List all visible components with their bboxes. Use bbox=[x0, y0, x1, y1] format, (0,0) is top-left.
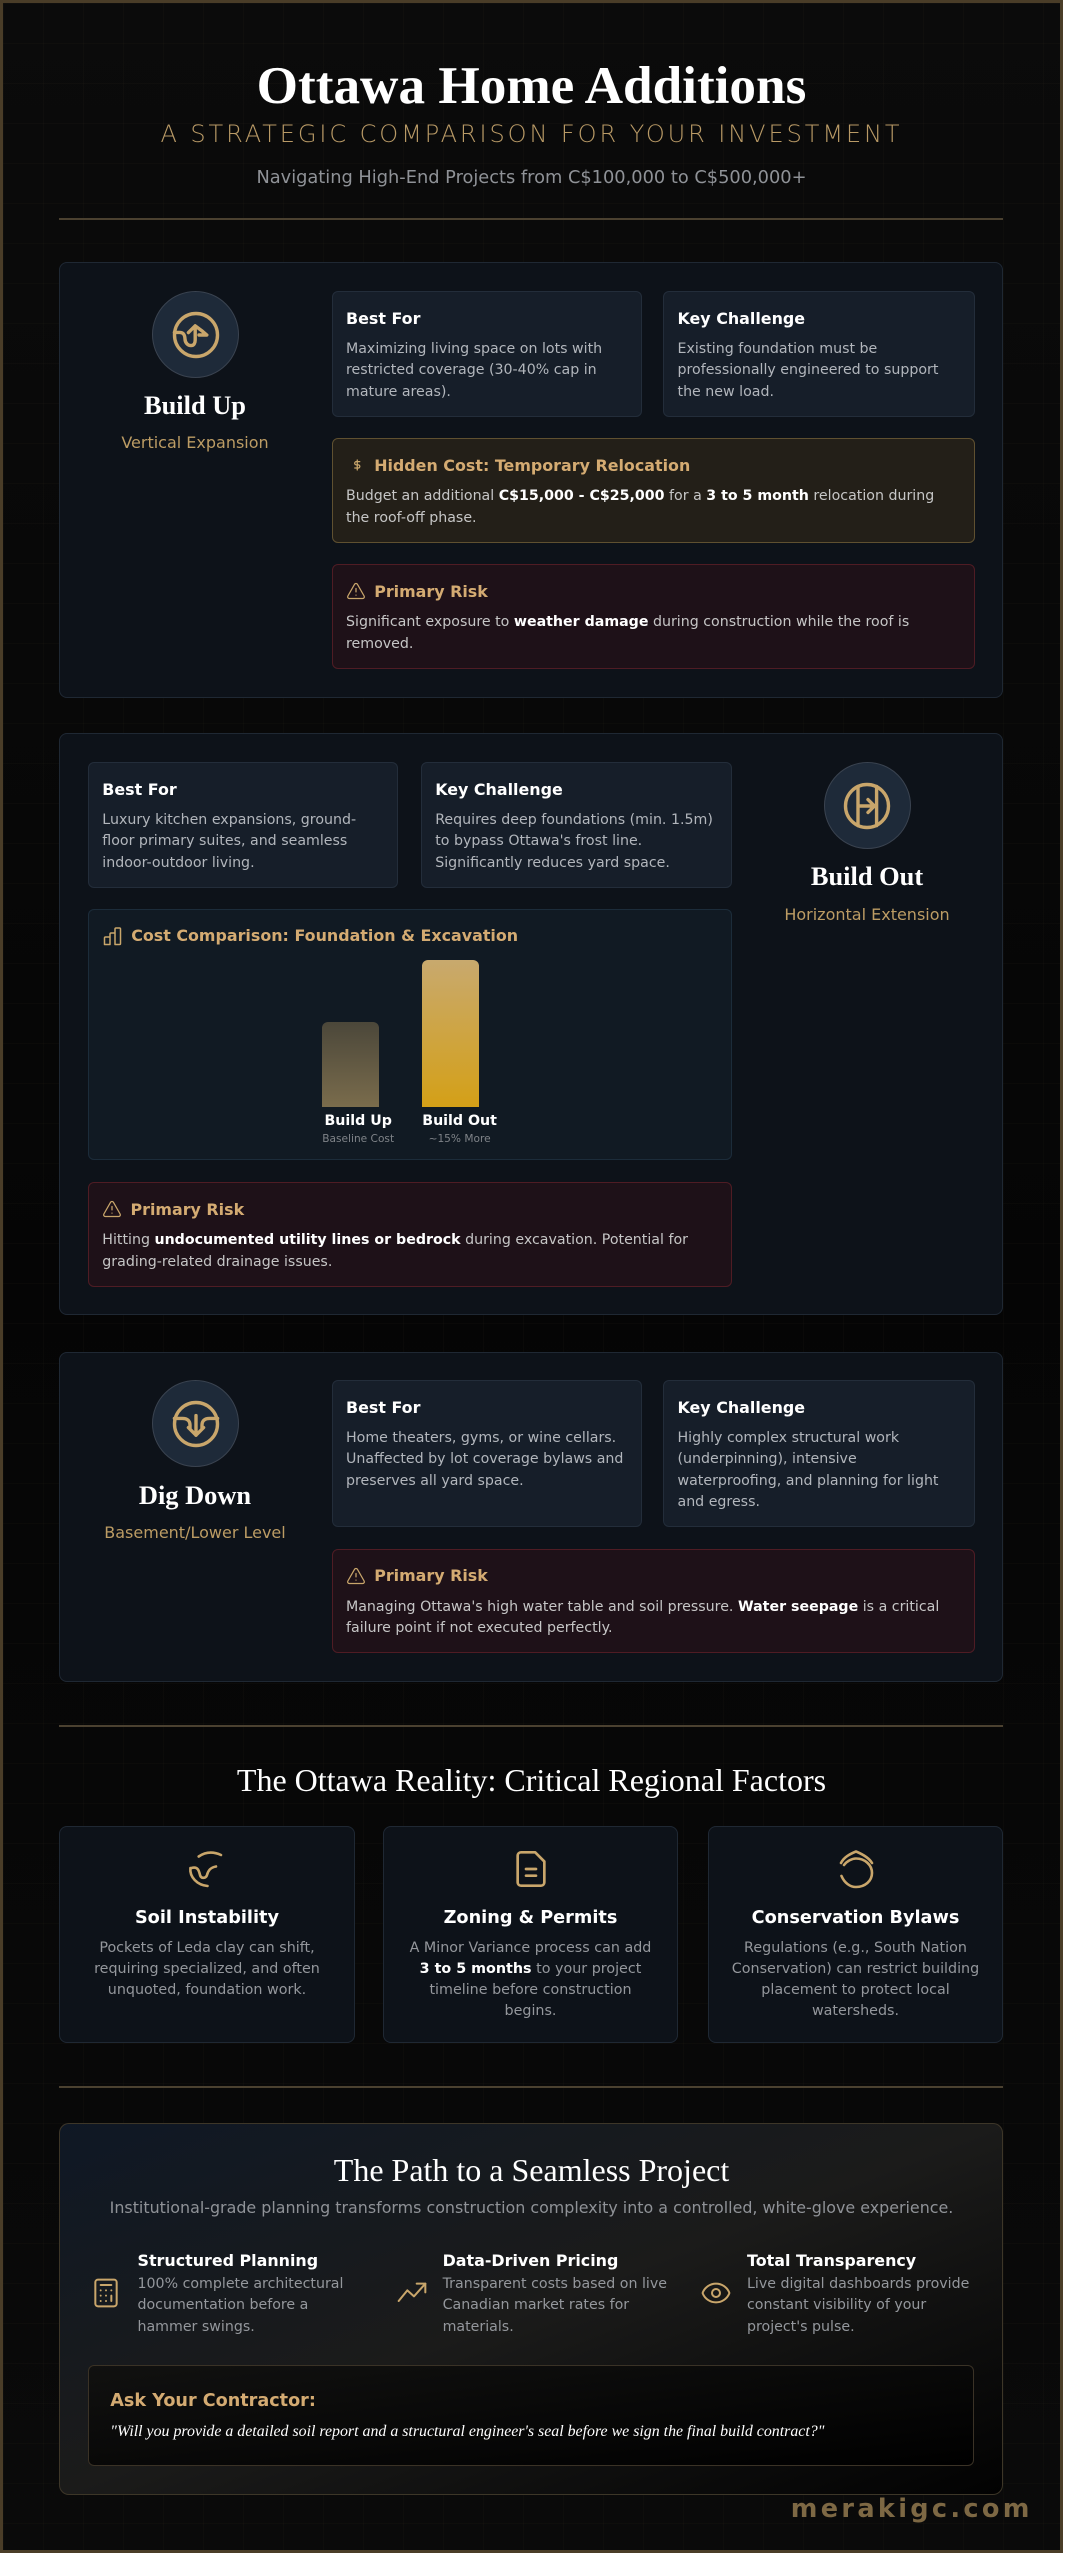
callout: primary risk bbox=[332, 1549, 974, 1653]
bar: build up bbox=[322, 1022, 379, 1107]
subheading: horizontal extension: Horizontal Extension bbox=[784, 905, 950, 924]
icon: build out bbox=[824, 762, 910, 849]
card: key challenge: Existing foundation must be bbox=[678, 341, 877, 357]
callout: primary risk: Primary Risk bbox=[374, 1566, 488, 1585]
subtitle: A STRATEGIC COMPARISON FOR YOUR INVESTMENT bbox=[160, 120, 902, 148]
callout: hidden cost bbox=[332, 438, 974, 543]
feature heading: Data-Driven Pricing bbox=[443, 2251, 618, 2270]
tagline: Navigating High-End Projects from C$100,000 to C$500,000+ bbox=[256, 167, 807, 188]
icon: dig down bbox=[152, 1380, 239, 1467]
card: key challenge: Key Challenge bbox=[435, 780, 563, 798]
card: best for bbox=[332, 1380, 642, 1527]
factor text bbox=[732, 1940, 979, 2019]
subheading: vertical expansion: Vertical Expansion bbox=[121, 433, 269, 452]
feature text: Live digital dashboards provide bbox=[747, 2276, 969, 2292]
section heading: regional factors: The Ottawa Reality: Critical Regional Factors bbox=[237, 1762, 826, 1798]
card: key challenge: Significantly reduces yard space. bbox=[435, 855, 670, 871]
card: key challenge: to bypass Ottawa's frost line. bbox=[435, 833, 642, 849]
card: best for: Best For bbox=[102, 780, 177, 798]
heading: build up: Build Up bbox=[144, 390, 246, 420]
heading: build out: Build Out bbox=[811, 861, 923, 891]
factor text: timeline before construction bbox=[429, 1982, 632, 1998]
feature text: project's pulse. bbox=[747, 2319, 855, 2335]
callout: primary risk: Significant exposure to weather damage during construction while the roof is bbox=[346, 614, 909, 630]
callout: primary risk: Primary Risk bbox=[374, 582, 488, 600]
card: best for: floor primary suites, and seamless bbox=[102, 833, 347, 849]
intro text: Institutional-grade planning transforms construction complexity into a controlled, white-glove experience. bbox=[110, 2198, 953, 2217]
icon: calculator bbox=[94, 2278, 118, 2308]
icon: eye bbox=[702, 2282, 730, 2304]
feature text: hammer swings. bbox=[138, 2319, 255, 2335]
panel: soil instability bbox=[59, 1826, 355, 2043]
quote: "Will you provide a detailed soil report and a structural engineer's seal before we sign the final build contract?" bbox=[110, 2423, 824, 2440]
watermark: merakigc.com bbox=[791, 2494, 1033, 2524]
card: best for: preserves all yard space. bbox=[346, 1473, 524, 1489]
card: best for: Best For bbox=[346, 1398, 420, 1416]
card: best for: restricted coverage (30-40% cap in bbox=[346, 362, 597, 378]
feature heading: Structured Planning bbox=[138, 2251, 318, 2270]
factor text: Conservation) can restrict building bbox=[732, 1961, 979, 1977]
heading: dig down: Dig Down bbox=[139, 1480, 251, 1510]
icon: soil bbox=[189, 1851, 222, 1888]
heading: The Path to a Seamless Project bbox=[334, 2152, 729, 2188]
card: key challenge: Requires deep foundations (min. 1.5m) bbox=[435, 812, 713, 828]
factor text bbox=[410, 1940, 651, 2019]
panel: build out bbox=[60, 734, 1003, 1315]
title: Ottawa Home Additions bbox=[257, 56, 806, 114]
callout: hidden cost: the roof-off phase. bbox=[346, 510, 477, 526]
callout: ask your contractor bbox=[88, 2365, 974, 2466]
card: key challenge: waterproofing, and planning for light bbox=[678, 1473, 938, 1489]
feature text: documentation before a bbox=[138, 2297, 308, 2313]
icon: document bbox=[516, 1851, 546, 1887]
callout: primary risk bbox=[88, 1182, 732, 1287]
factor heading: Conservation Bylaws bbox=[752, 1908, 959, 1928]
card: key challenge: the new load. bbox=[678, 384, 774, 400]
card: key challenge: (underpinning), intensive bbox=[678, 1451, 857, 1467]
factor text: Pockets of Leda clay can shift, bbox=[99, 1940, 315, 1956]
feature text bbox=[442, 2276, 667, 2335]
feature: total transparency bbox=[702, 2251, 969, 2335]
chart heading: Cost Comparison: Foundation & Excavation bbox=[131, 926, 518, 945]
card: key challenge bbox=[663, 1380, 974, 1527]
card: best for: mature areas). bbox=[346, 384, 451, 400]
factor text: placement to protect local bbox=[761, 1982, 950, 1998]
callout: primary risk: Primary Risk bbox=[130, 1200, 244, 1218]
feature text: Transparent costs based on live bbox=[443, 2276, 667, 2292]
subheading: basement: Basement/Lower Level bbox=[104, 1523, 286, 1542]
factor heading: Soil Instability bbox=[135, 1908, 279, 1928]
feature: data-driven pricing bbox=[398, 2251, 667, 2335]
card: best for: Maximizing living space on lots with bbox=[346, 341, 602, 357]
card: best for: Best For bbox=[346, 308, 420, 328]
feature text: 100% complete architectural bbox=[138, 2276, 343, 2292]
callout: hidden cost: Hidden Cost: Temporary Relocation bbox=[374, 456, 690, 474]
card: key challenge: Highly complex structural work bbox=[678, 1430, 899, 1446]
factor text: watersheds. bbox=[812, 2003, 899, 2019]
panel: conservation bylaws bbox=[708, 1826, 1003, 2043]
bar label: build up: Build Up bbox=[324, 1113, 392, 1129]
callout heading: Ask Your Contractor: bbox=[110, 2391, 316, 2411]
factor text: unquoted, foundation work. bbox=[108, 1982, 306, 1998]
card: best for: indoor-outdoor living. bbox=[102, 855, 255, 871]
card: key challenge bbox=[421, 762, 732, 888]
callout: primary risk: Managing Ottawa's high water table and soil pressure. Water seepage is a critical bbox=[346, 1599, 939, 1615]
factor heading: Zoning & Permits bbox=[444, 1908, 617, 1928]
factor text bbox=[94, 1940, 320, 1998]
feature text: Canadian market rates for bbox=[443, 2297, 629, 2313]
factor text: begins. bbox=[504, 2003, 556, 2019]
card: best for: Luxury kitchen expansions, ground- bbox=[102, 812, 356, 828]
icon: bar chart bbox=[104, 927, 122, 946]
factor text: requiring specialized, and often bbox=[94, 1961, 320, 1977]
bar: build out bbox=[422, 960, 479, 1107]
factor text: A Minor Variance process can add bbox=[410, 1940, 651, 1956]
feature heading: Total Transparency bbox=[747, 2251, 916, 2270]
callout: primary risk: failure point if not executed perfectly. bbox=[346, 1620, 612, 1636]
feature: structured planning bbox=[94, 2251, 343, 2335]
panel: build up bbox=[60, 262, 1003, 698]
callout: primary risk: grading-related drainage issues. bbox=[102, 1254, 332, 1270]
panel: seamless project bbox=[60, 2123, 1003, 2495]
factor text: 3 to 5 months to your project bbox=[420, 1961, 641, 1977]
card: key challenge: professionally engineered to support bbox=[678, 362, 938, 378]
factor text: Regulations (e.g., South Nation bbox=[744, 1940, 967, 1956]
bar note: 15 percent more: ~15% More bbox=[429, 1133, 491, 1145]
icon: build up bbox=[152, 291, 239, 378]
card: best for: Unaffected by lot coverage bylaws and bbox=[346, 1451, 623, 1467]
card: key challenge bbox=[663, 291, 974, 417]
feature text bbox=[747, 2276, 969, 2335]
feature text: materials. bbox=[443, 2319, 514, 2335]
card: key challenge: Key Challenge bbox=[678, 308, 805, 328]
panel: dig down bbox=[60, 1352, 1003, 1682]
callout: primary risk bbox=[332, 564, 974, 669]
card: best for bbox=[332, 291, 642, 417]
callout: primary risk: removed. bbox=[346, 636, 413, 652]
icon: conservation bbox=[840, 1850, 874, 1888]
callout: primary risk: Hitting undocumented utility lines or bedrock during excavation. Potential for bbox=[102, 1232, 688, 1248]
bar chart: cost comparison bbox=[88, 909, 732, 1160]
header bbox=[160, 56, 902, 188]
card: best for: Home theaters, gyms, or wine cellars. bbox=[346, 1430, 616, 1446]
callout: hidden cost: Budget an additional C$15,000 - C$25,000 for a 3 to 5 month relocation during bbox=[346, 488, 934, 504]
panel: zoning and permits bbox=[383, 1826, 678, 2043]
card: key challenge: and egress. bbox=[678, 1494, 760, 1510]
card: key challenge: Key Challenge bbox=[678, 1398, 805, 1416]
icon: trending up bbox=[398, 2282, 426, 2302]
feature text bbox=[138, 2276, 343, 2335]
feature text: constant visibility of your bbox=[747, 2297, 926, 2313]
bar note: baseline cost: Baseline Cost bbox=[322, 1133, 394, 1145]
bar label: build out: Build Out bbox=[422, 1113, 497, 1129]
card: best for bbox=[88, 762, 398, 888]
